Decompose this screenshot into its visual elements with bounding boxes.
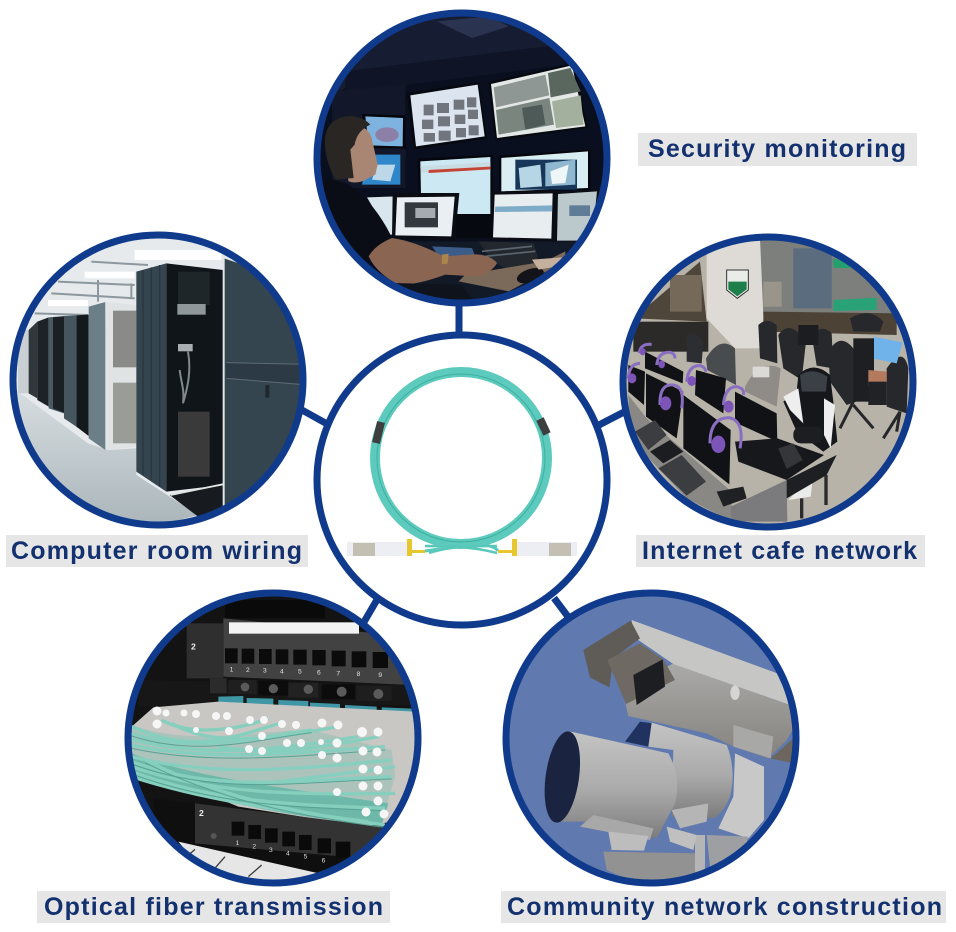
bottom patch panel: 1 <box>236 840 240 847</box>
label: Optical fiber transmission: Optical fiber transmission <box>44 893 383 921</box>
top patch panel: 8 <box>357 671 361 678</box>
label: Security monitoring: Security monitoring <box>648 135 906 163</box>
back row dark chairs <box>758 313 908 413</box>
purple headphones <box>628 344 744 448</box>
desk front panel <box>731 480 787 522</box>
front cabinet <box>222 258 300 506</box>
monitor: desk left <box>367 193 459 241</box>
main rack <box>136 263 223 492</box>
monitor: right video <box>499 150 590 193</box>
laptop and player <box>853 337 903 405</box>
connector lines between circles <box>302 302 626 622</box>
wall under monitors <box>456 216 491 238</box>
desk surface <box>628 395 732 522</box>
bottom patch panel: 2 <box>252 843 256 850</box>
wall logo <box>727 270 748 298</box>
front camera <box>539 729 677 851</box>
silver rack <box>89 302 136 450</box>
monitor: left small lower <box>362 155 400 185</box>
aqua fibers <box>132 725 395 823</box>
label: Community network construction: Community network construction <box>507 893 942 921</box>
bottom patch panel: 6 <box>322 858 326 865</box>
label: Internet cafe network: Internet cafe network <box>642 537 917 565</box>
center circle: fiber patch cable <box>317 335 607 625</box>
bottom patch panel: 4 <box>286 850 290 857</box>
top patch panel: 7 <box>336 670 340 677</box>
desk and keyboard <box>412 242 576 299</box>
top patch panel: 4 <box>280 668 284 675</box>
panel: computer room wiring photo <box>8 230 308 530</box>
upper camera housing <box>583 620 793 763</box>
panel: community network construction photo <box>500 590 800 890</box>
top patch panel: 5 <box>298 669 302 676</box>
monitor: left small upper <box>362 114 405 149</box>
top patch panel: 1 <box>230 667 234 674</box>
background room <box>642 262 707 322</box>
monitor: desk middle <box>490 191 555 242</box>
floor front dark <box>170 485 225 517</box>
aqua fiber loop <box>375 372 547 553</box>
panel: internet cafe network photo <box>620 235 920 535</box>
black sleeves <box>376 419 547 443</box>
monitor: desk right <box>555 189 599 243</box>
monitor: top right <box>489 63 588 141</box>
keyboards <box>635 420 706 496</box>
label: Computer room wiring: Computer room wiring <box>11 537 302 565</box>
left LC connector <box>347 539 425 556</box>
bottom patch panel: 3 <box>269 847 273 854</box>
white ferrules <box>152 706 388 818</box>
floor <box>17 392 196 522</box>
top patch panel: 6 <box>317 669 321 676</box>
pole and base <box>603 753 764 883</box>
right LC connector <box>498 539 577 556</box>
white connector field <box>132 702 417 827</box>
monitors <box>628 352 777 484</box>
ceiling <box>35 262 148 315</box>
bottom patch panel: 5 <box>304 854 308 861</box>
top patch panel <box>187 618 412 685</box>
panel: optical fiber transmission photo <box>125 590 425 890</box>
bottom patch panel: 2 <box>199 808 204 818</box>
blue adapters <box>218 696 412 712</box>
top patch panel: 9 <box>378 672 382 679</box>
bracket <box>667 827 697 850</box>
grey chairs <box>687 334 781 407</box>
person <box>322 116 497 308</box>
bottom patch panel <box>153 798 425 890</box>
connector bar <box>210 678 392 701</box>
black desk <box>735 438 824 480</box>
monitor: center map <box>418 155 493 216</box>
far racks <box>18 315 89 436</box>
top patch panel: 3 <box>263 668 267 675</box>
chair legs <box>840 402 900 438</box>
top patch panel: 2 <box>191 641 196 651</box>
middle camera <box>625 722 733 828</box>
monitor: top center <box>407 82 487 150</box>
top patch panel: 2 <box>246 667 250 674</box>
gaming chair <box>783 367 837 452</box>
panel: security monitoring photo <box>312 8 612 308</box>
